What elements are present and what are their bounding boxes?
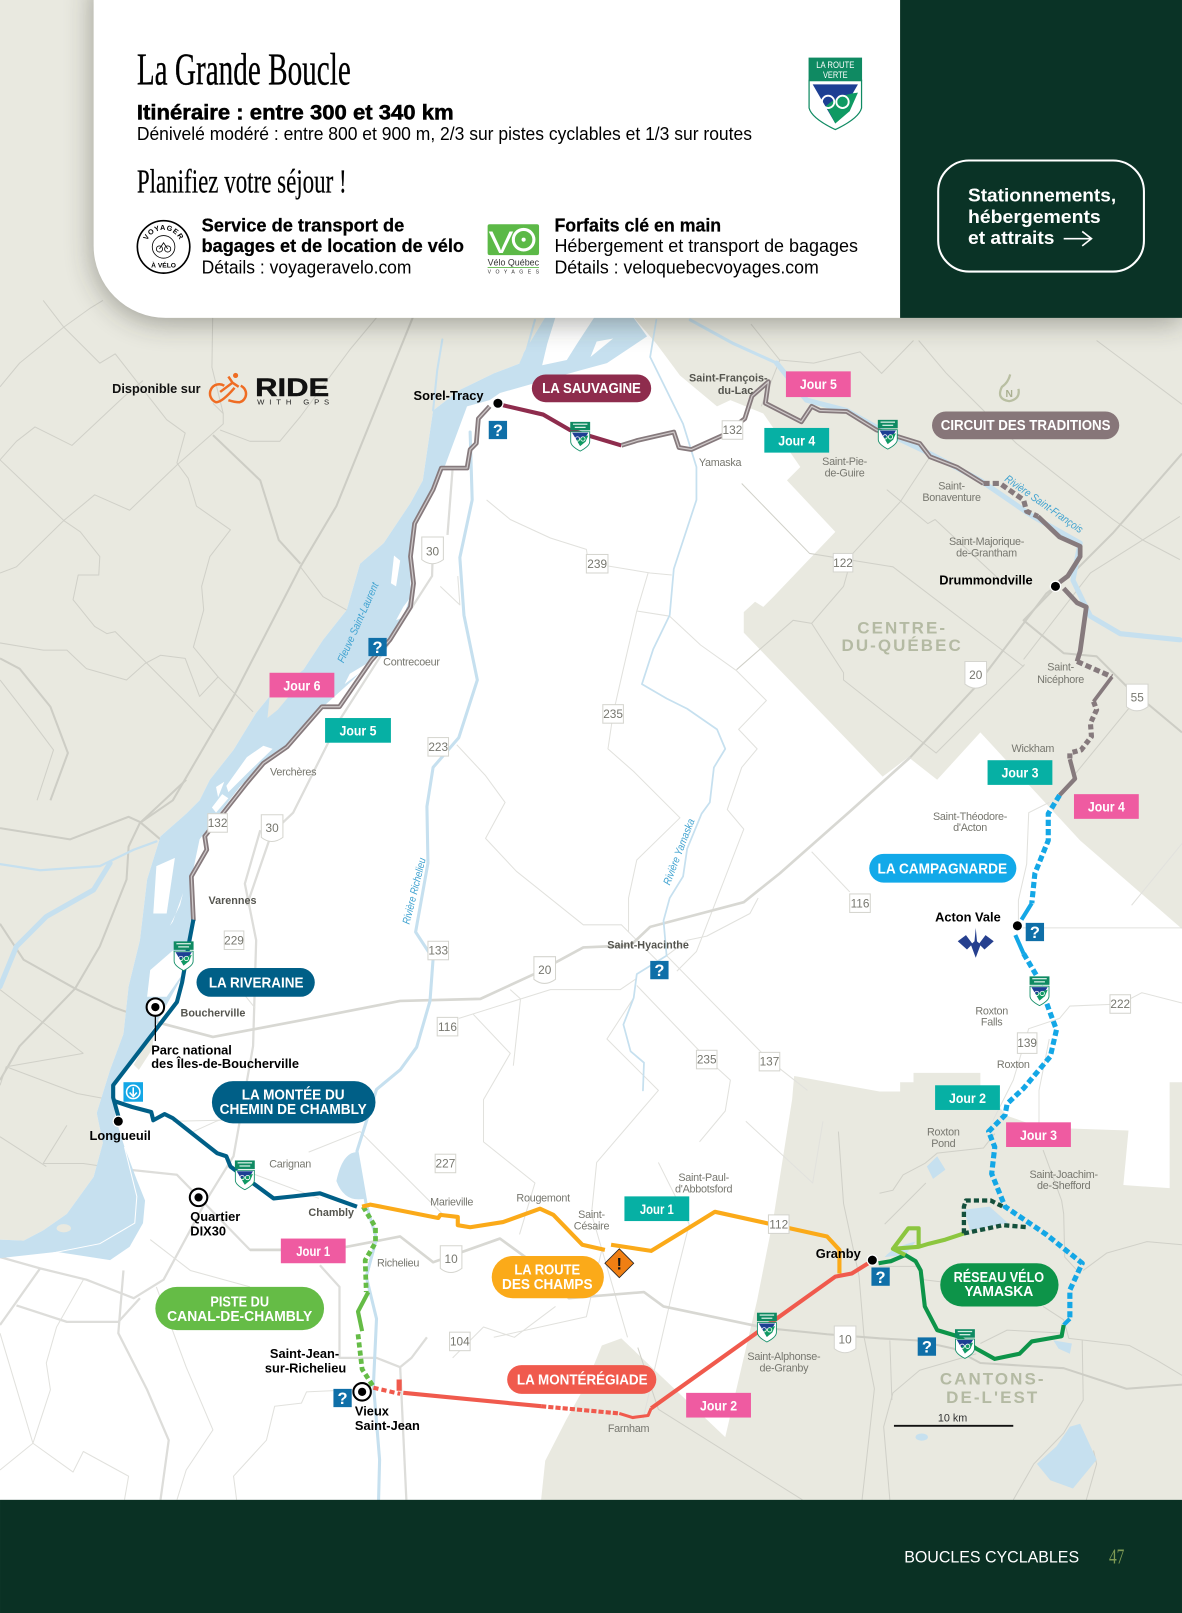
minor localities: Marieville <box>430 1197 473 1209</box>
legend: Disponible sur Ride with GPS: Disponible sur <box>112 381 201 396</box>
shield 30 south <box>261 815 283 841</box>
cities: Saint-Jean <box>355 1418 420 1433</box>
minor localities: d'Acton <box>953 822 987 834</box>
arrow <box>1064 231 1091 246</box>
minor localities: Farnham <box>608 1423 650 1435</box>
shield 112: 112 <box>769 1217 788 1231</box>
Jour 5 pink: Jour 5 <box>800 376 837 392</box>
logo: Vélo Québec Voyages <box>488 224 540 276</box>
route: Piste du Canal-de-Chambly <box>358 1207 375 1387</box>
pill: La Campagnarde: LA CAMPAGNARDE <box>877 861 1007 877</box>
header panel <box>94 0 900 318</box>
shield 137: 137 <box>760 1055 779 1069</box>
cities: Vieux <box>355 1403 390 1418</box>
title: La Grande Boucle <box>137 44 351 94</box>
minor localities: Rougemont <box>516 1193 570 1205</box>
route: Réseau Vélo Yamaska <box>879 1200 1064 1359</box>
logo: Vélo Québec Voyages: VOYAGES <box>488 270 540 276</box>
POI: Parc national des Îles-de-Boucherville <box>147 998 164 1041</box>
islands <box>147 314 613 997</box>
Jour 1 pink <box>281 1239 346 1263</box>
bassin de Chambly <box>336 1152 366 1199</box>
Jour 3 teal <box>988 760 1052 785</box>
minor localities: de-Shefford <box>1037 1180 1091 1192</box>
pill: La Riveraine <box>196 968 315 997</box>
minor localities: de-Guire <box>825 467 865 479</box>
minor localities: Pond <box>931 1138 956 1150</box>
shield 55: 55 <box>1131 691 1144 705</box>
cities: Saint-Jean- <box>270 1346 339 1361</box>
shield 116 west: 116 <box>438 1020 457 1034</box>
route: La Sauvagine <box>503 405 621 445</box>
shield 55 <box>1126 684 1148 711</box>
cities: Longueuil <box>90 1128 151 1143</box>
Jour 2 teal <box>935 1085 1000 1110</box>
fleuve Saint-Laurent <box>0 314 647 1260</box>
minor localities: Roxton <box>927 1127 960 1139</box>
route: Circuit des traditions (nord) <box>191 406 490 921</box>
pill: Piste du Canal-de-Chambly: PISTE DU <box>210 1294 269 1310</box>
channels west of the river <box>0 320 535 987</box>
Jour 1 teal <box>624 1196 689 1221</box>
points of interest <box>147 998 371 1401</box>
elevation: Dénivelé modéré : entre 800 et 900 m, 2/3 sur pistes cyclables et 1/3 sur routes <box>137 123 752 144</box>
logo: Vélo Québec Voyages: Vélo Québec <box>488 257 539 267</box>
minor localities: d'Abbotsford <box>675 1183 732 1195</box>
minor localities: Roxton <box>997 1059 1030 1071</box>
cities: Sorel-Tracy <box>414 388 484 403</box>
button: parking, lodging, attractions: hébergements <box>968 206 1101 227</box>
shield 223: 223 <box>428 740 449 754</box>
shield 239: 239 <box>587 557 607 571</box>
pill: La Montérégiade: LA MONTÉRÉGIADE <box>517 1372 648 1389</box>
minor localities: Bonaventure <box>922 492 981 504</box>
shield 122: 122 <box>833 556 853 570</box>
white line in river basin <box>16 1147 137 1260</box>
Jour 5 pink <box>786 371 851 397</box>
icon: caution <box>605 1249 634 1278</box>
minor localities: Contrecoeur <box>383 657 440 669</box>
shield 222: 222 <box>1110 997 1130 1011</box>
route: La Montérégiade <box>373 1263 868 1418</box>
dark side panel <box>900 0 1182 318</box>
heading: plan your stay: Planifiez votre séjour ! <box>137 163 347 200</box>
button: parking, lodging, attractions <box>938 160 1144 272</box>
region: Cantons-de-l'Est: DE-L'EST <box>946 1388 1039 1407</box>
footer <box>0 1500 1182 1613</box>
logo: La Route Verte: LA ROUTE <box>816 60 854 70</box>
Jour 3 pink <box>1006 1122 1071 1147</box>
shield 20 west: 20 <box>538 963 552 977</box>
Jour 4 teal <box>764 428 829 453</box>
shield 30 north <box>422 537 443 564</box>
label: Rivière Saint-François: Rivière Saint-François <box>1002 473 1085 536</box>
pill: Circuit des traditions: CIRCUIT DES TRADITIONS <box>941 418 1111 434</box>
packages text: Hébergement et transport de bagages <box>554 235 858 256</box>
Jour 2 teal: Jour 2 <box>949 1090 986 1106</box>
shield 116 west <box>437 1017 458 1036</box>
cities <box>90 388 1033 1433</box>
page number: 47 <box>1109 1547 1124 1569</box>
logo: La Route Verte: VERTE <box>823 70 848 80</box>
city dots <box>113 398 1061 1265</box>
rivière Saint-François <box>690 320 1180 640</box>
Jour 5 teal: Jour 5 <box>339 723 377 739</box>
legend: Disponible sur Ride with GPS <box>112 373 329 406</box>
shield 10 west: 10 <box>445 1252 458 1266</box>
cities: DIX30 <box>190 1223 226 1238</box>
rivière Yamaska <box>623 320 725 1090</box>
cities: Drummondville <box>939 572 1033 587</box>
roads <box>0 300 1182 1500</box>
shield 112 <box>768 1215 789 1233</box>
minor localities: Saint-Joachim- <box>1029 1169 1099 1181</box>
info icons <box>333 421 1044 1408</box>
icon: Voyager à vélo <box>136 220 191 274</box>
pill: La Riveraine: LA RIVERAINE <box>209 976 304 992</box>
pill: La Montérégiade <box>507 1365 656 1394</box>
lacs <box>885 1156 1097 1489</box>
Jour 1 teal: Jour 1 <box>640 1201 674 1217</box>
Jour 2 pink <box>686 1393 751 1418</box>
river labels <box>335 473 1085 926</box>
pill: Piste du Canal-de-Chambly: CANAL-DE-CHAMBLY <box>167 1309 313 1325</box>
minor localities: Saint-Pie- <box>822 456 868 468</box>
minor localities: Yamaska <box>699 457 742 469</box>
shield 116 east: 116 <box>851 896 870 910</box>
shield 229: 229 <box>224 933 244 947</box>
route: La Campagnarde <box>989 795 1082 1325</box>
shield 132 east: 132 <box>723 423 742 437</box>
shield 10 east: 10 <box>839 1332 852 1346</box>
minor localities: Saint-Majorique- <box>949 536 1025 548</box>
minor localities: du-Lac <box>718 385 753 397</box>
icon: Voyager à vélo: VOYAGER <box>142 225 184 240</box>
header shadow <box>94 0 1182 322</box>
region: Centre-du-Québec: CENTRE- <box>857 619 947 638</box>
shield 235 south: 235 <box>697 1053 717 1067</box>
route: Circuit des traditions (est) <box>621 382 1112 795</box>
pill: La Sauvagine: LA SAUVAGINE <box>542 381 641 397</box>
Jour 1 pink: Jour 1 <box>296 1243 330 1259</box>
minor localities: Roxton <box>975 1005 1008 1017</box>
shield 227: 227 <box>436 1157 455 1171</box>
minor localities: Wickham <box>1012 743 1054 755</box>
pill: La Campagnarde <box>869 854 1016 883</box>
Jour 5 teal <box>325 718 391 743</box>
Jour 4 pink <box>1074 794 1139 819</box>
central roads <box>150 468 1182 1420</box>
icon: north arrow <box>1000 374 1019 401</box>
minor localities: Césaire <box>574 1220 609 1232</box>
west shore roads <box>0 300 420 1169</box>
transport text: Service de transport de <box>202 214 404 235</box>
shield 133: 133 <box>428 944 449 958</box>
minor localities: Saint- <box>1047 662 1075 674</box>
icon: metro <box>123 1082 143 1102</box>
pill: Réseau Vélo Yamaska: YAMASKA <box>964 1284 1034 1300</box>
minor localities: Verchères <box>270 767 317 779</box>
label: Rivière Richelieu: Rivière Richelieu <box>401 857 429 926</box>
minor localities: Nicéphore <box>1037 674 1084 686</box>
Jour 6 pink: Jour 6 <box>283 677 321 693</box>
minor localities: Saint-François- <box>689 373 768 385</box>
pill: La Montée du chemin de Chambly: LA MONTÉE DU <box>242 1087 345 1104</box>
pill: La Route des Champs <box>492 1256 604 1298</box>
north-east roads <box>737 324 1182 777</box>
shield 139: 139 <box>1017 1036 1037 1050</box>
Jour 6 pink <box>270 673 334 697</box>
packages text: Détails : veloquebecvoyages.com <box>554 257 819 278</box>
pill: Réseau Vélo Yamaska: RÉSEAU VÉLO <box>954 1269 1044 1286</box>
shield 116 east <box>850 894 870 912</box>
shield 30 south: 30 <box>266 821 279 835</box>
button: parking, lodging, attractions: et attraits <box>968 227 1054 248</box>
beige islands <box>57 691 293 1232</box>
cities: Quartier <box>190 1209 240 1224</box>
shield 235 north: 235 <box>603 707 623 721</box>
minor localities <box>181 373 1099 1435</box>
day labels <box>270 371 1139 1418</box>
minor localities: de-Granby <box>760 1362 809 1374</box>
minor localities: Saint-Hyacinthe <box>607 939 689 951</box>
cities: Granby <box>816 1246 862 1261</box>
region: Centre-du-Québec: DU-QUÉBEC <box>842 636 963 655</box>
pill: La Montée du chemin de Chambly: CHEMIN DE CHAMBLY <box>220 1102 367 1118</box>
label: Rivière Yamaska: Rivière Yamaska <box>661 817 698 887</box>
icon: Route Verte markers <box>174 420 1049 1358</box>
POI: Vieux Saint-Jean <box>353 1383 371 1401</box>
land: Cantons-de-l'Est <box>541 1073 1182 1500</box>
transport text: bagages et de location de vélo <box>202 235 464 256</box>
minor localities: Saint-Théodore- <box>933 811 1008 823</box>
minor localities: Saint-Alphonse- <box>747 1351 821 1363</box>
region: Cantons-de-l'Est: CANTONS- <box>940 1370 1046 1389</box>
logo: Vélo Québec Voyages: V <box>489 224 514 260</box>
packages text: Forfaits clé en main <box>554 214 721 235</box>
packages text <box>554 214 858 278</box>
pill: Piste du Canal-de-Chambly <box>155 1287 324 1330</box>
section name: BOUCLES CYCLABLES <box>904 1549 1079 1567</box>
icon: north arrow: N <box>1005 389 1013 400</box>
minor localities: Saint-Paul- <box>678 1172 730 1184</box>
logo: La Route Verte <box>809 58 862 130</box>
Jour 3 pink: Jour 3 <box>1020 1127 1057 1143</box>
shield 20 east: 20 <box>969 668 983 682</box>
cities: des Îles-de-Boucherville <box>151 1056 299 1071</box>
label: Fleuve Saint-Laurent: Fleuve Saint-Laurent <box>335 580 382 665</box>
minor localities: Falls <box>981 1017 1003 1029</box>
shield 132 west: 132 <box>208 816 227 830</box>
rivière Richelieu <box>357 432 477 1500</box>
scale bar: 10 km <box>938 1413 967 1425</box>
legend: Disponible sur Ride with GPS: WITH GPS <box>257 397 329 406</box>
shield 30 north: 30 <box>426 544 440 558</box>
cities: Acton Vale <box>935 910 1001 925</box>
transport text: Détails : voyageravelo.com <box>202 257 411 278</box>
icon: cyclist <box>210 373 246 402</box>
shield 104: 104 <box>450 1335 470 1349</box>
minor localities: Richelieu <box>377 1257 419 1269</box>
south-east roads <box>638 1132 1182 1500</box>
pill: La Sauvagine <box>532 374 651 402</box>
button: parking, lodging, attractions: Stationnements, <box>968 185 1116 206</box>
icon: caution: ! <box>617 1255 622 1273</box>
minor localities: Carignan <box>269 1159 311 1171</box>
transport text <box>202 214 464 278</box>
pill: Circuit des traditions <box>932 411 1119 439</box>
shield 239 <box>586 554 608 573</box>
scale bar <box>894 1413 1013 1426</box>
minor localities: Chambly <box>308 1207 354 1219</box>
Jour 3 teal: Jour 3 <box>1001 765 1039 781</box>
shield 20 east <box>965 661 987 688</box>
minor localities: de-Grantham <box>956 548 1017 560</box>
legend: Disponible sur Ride with GPS: RIDE <box>255 375 329 402</box>
icon: Voyager à vélo: À VÉLO <box>151 260 176 269</box>
pills <box>155 374 1119 1394</box>
cities: sur-Richelieu <box>265 1360 346 1375</box>
cities: Parc national <box>151 1042 232 1057</box>
shield 20 west <box>534 957 556 983</box>
land: west of the river <box>0 0 556 1241</box>
minor localities: Saint- <box>578 1209 606 1221</box>
pill: La Route des Champs: DES CHAMPS <box>502 1277 593 1293</box>
shield 139 <box>1017 1033 1037 1053</box>
route: La Montée du chemin de Chambly <box>113 1101 357 1207</box>
shield 10 east <box>834 1326 856 1353</box>
minor localities: Saint- <box>938 481 966 493</box>
Jour 4 pink: Jour 4 <box>1088 799 1125 815</box>
pill: Réseau Vélo Yamaska <box>940 1263 1059 1306</box>
pill: La Route des Champs: LA ROUTE <box>514 1263 581 1279</box>
route: La Route des Champs <box>362 1205 839 1274</box>
pill: La Montée du chemin de Chambly <box>212 1081 375 1123</box>
route: La Riveraine <box>113 920 193 1116</box>
south-west roads <box>0 830 556 1500</box>
icon: Acton Vale logo <box>958 928 994 958</box>
Jour 2 pink: Jour 2 <box>700 1397 737 1413</box>
minor localities: Boucherville <box>181 1007 245 1019</box>
minor localities: Varennes <box>208 895 257 907</box>
land: Centre-du-Québec <box>617 0 1182 929</box>
highway shields <box>208 421 1148 1353</box>
shield 10 west <box>440 1246 462 1273</box>
POI: Quartier DIX30 <box>190 1189 207 1206</box>
Jour 4 teal: Jour 4 <box>778 432 816 448</box>
itinerary: Itinéraire : entre 300 et 340 km <box>137 99 454 124</box>
place names <box>90 373 1099 1435</box>
